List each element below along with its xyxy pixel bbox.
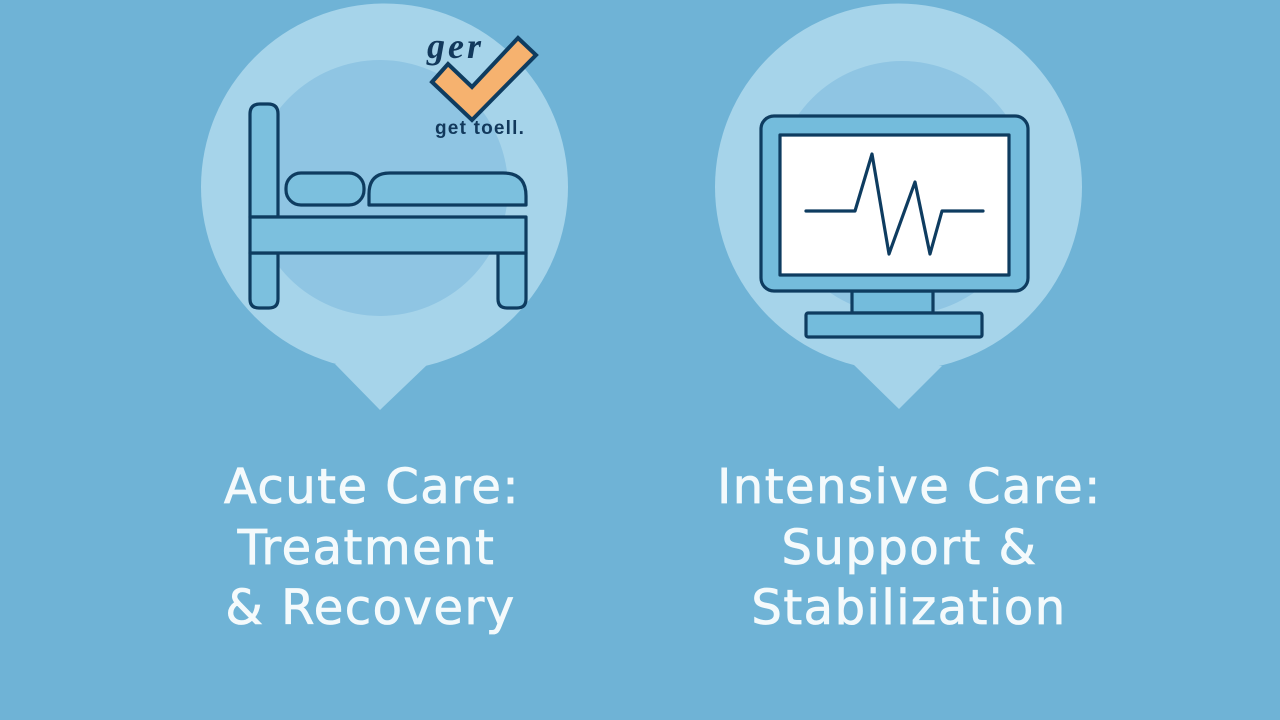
heading: acute care: & Recovery	[225, 580, 516, 636]
check mark lower label: get toell.	[435, 118, 525, 139]
location pin badge: acute care	[201, 4, 568, 410]
heading: intensive care: Stabilization	[751, 580, 1067, 636]
heading: acute care: Treatment	[237, 520, 495, 576]
panel: intensive care	[715, 4, 1102, 636]
location pin badge: intensive care	[715, 4, 1082, 409]
panel: acute care	[201, 4, 568, 636]
check mark upper label: ger	[426, 26, 484, 66]
icon: heart monitor	[761, 116, 1028, 337]
heading: acute care: Acute Care:	[224, 459, 520, 515]
icon: orange check mark	[432, 38, 536, 120]
icon: hospital bed	[250, 104, 526, 308]
heading: intensive care: Support &	[782, 520, 1037, 576]
heading: intensive care: Intensive Care:	[717, 459, 1102, 515]
